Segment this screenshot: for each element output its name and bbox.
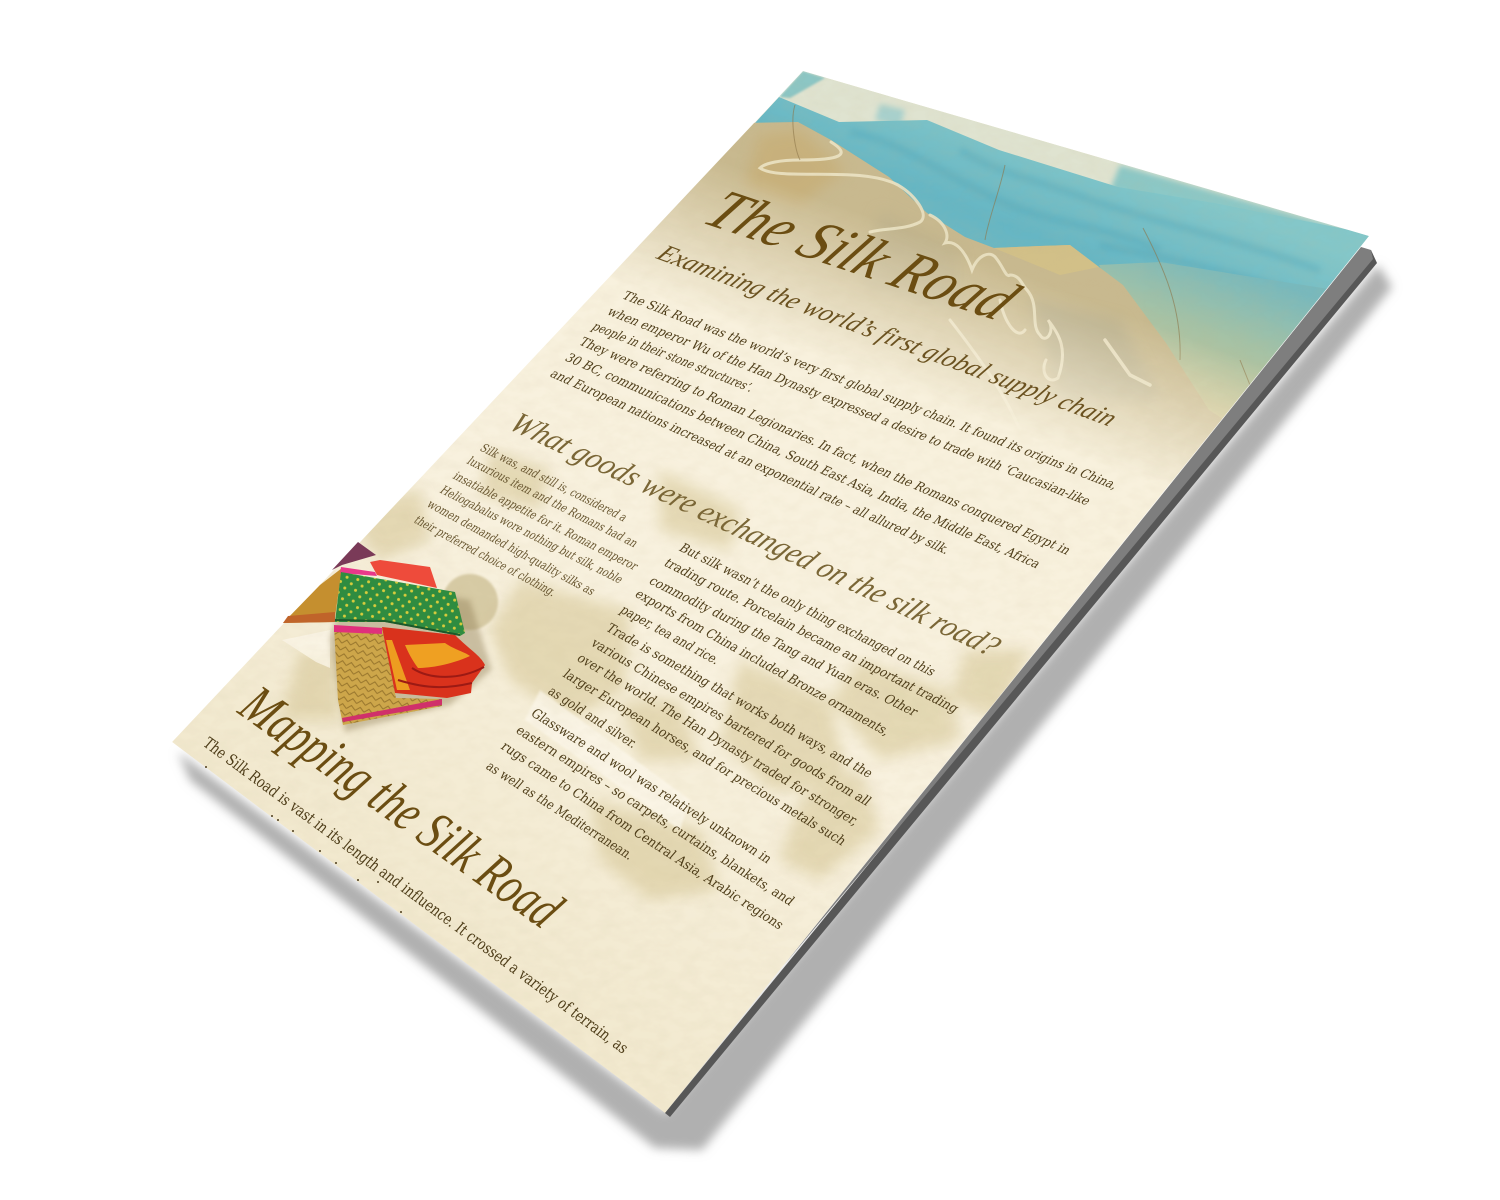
heading: mapping: Mapping the Silk Road [227, 674, 575, 940]
text block: left column: Silk was, and still is, considered a [477, 441, 631, 524]
text block: introduction: 30 BC, communications between China, South East Asia, India, the Middle East, Africa [561, 351, 1044, 572]
lower page stack [665, 247, 1377, 1117]
title: The Silk Road [691, 179, 1034, 332]
text block: introduction: when emperor Wu of the Han Dynasty expressed a desire to trade with ‘Caucasian-like [603, 305, 1094, 508]
green silk [335, 572, 465, 636]
distant blue ridges [755, 97, 1369, 289]
red silk [370, 560, 437, 588]
text block: left column: women demanded high-quality silks as [424, 497, 599, 598]
hazy green slopes [1099, 262, 1326, 418]
paper grain [160, 60, 1380, 1120]
text block: right column: as well as the Mediterranean. [482, 759, 637, 863]
tan mountains [620, 122, 1204, 476]
pink border [340, 567, 377, 576]
text block: right column: exports from China included Bronze ornaments, [631, 587, 894, 739]
text block: left column: Heliogabalus wore nothing but silk, noble [437, 483, 627, 586]
text block: introduction: They were referring to Roman Legionaries. In fact, when the Romans conquered Egypt in [575, 335, 1074, 558]
text block: right column: over the world. The Han Dynasty traded for stronger, [573, 651, 862, 829]
panel: parchment page [160, 60, 1380, 1120]
gold silk [283, 568, 342, 623]
text block: introduction: and European nations increased at an exponential rate – all allured by silk. [546, 367, 954, 557]
text block: introduction: The Silk Road was the world’s very first global supply chain. It found its origins in China, [618, 289, 1122, 493]
text block: right column: trading route. Porcelain became an important trading [660, 556, 962, 716]
text block: right column: Trade is something that works both ways, and the [602, 621, 876, 781]
woven gold silk [334, 626, 442, 725]
text block: left column: luxurious item and the Romans had an [464, 454, 642, 550]
clipped next line specks at page edge [205, 766, 402, 913]
text block: left column [411, 441, 642, 599]
text block: right column: paper, tea and rice. [616, 603, 723, 668]
text block: right column: commodity during the Tang and Yuan eras. Other [645, 574, 922, 720]
sky [781, 71, 1342, 228]
drop shadow [178, 265, 1392, 1150]
text block: right column: various Chinese empires bartered for goods from all [587, 635, 874, 809]
paper cracks [793, 105, 1250, 385]
text block: right column: larger European horses, and for precious metals such [559, 667, 850, 849]
text block: right column [482, 541, 962, 933]
text block: introduction: people in their stone structures’. [588, 320, 758, 395]
text block: right column: as gold and silver. [544, 684, 640, 752]
subtitle: Examining the world’s first global supply chain [650, 239, 1124, 431]
winding roads [760, 142, 1150, 430]
text block: left column: their preferred choice of clothing. [411, 513, 560, 599]
heading: goods exchanged: What goods were exchanged on the silk road? [502, 406, 1009, 662]
text block: right column: But silk wasn’t the only thing exchanged on this [675, 541, 939, 679]
red folded silk [382, 627, 485, 698]
text block: right column: rugs came to China from Central Asia, Arabic regions [497, 739, 787, 933]
landscape photo header [620, 71, 1369, 476]
illustration: folded silk fabrics [283, 542, 492, 732]
text block: left column: insatiable appetite for it. Roman emperor [450, 469, 642, 573]
text block: mapping intro: The Silk Road is vast in its length and influence. It crossed a variety of terrain, as [199, 734, 632, 1057]
purple silk [332, 542, 376, 570]
text block: right column: Glassware and wool was relatively unknown in [527, 706, 775, 867]
text block: right column: eastern empires – so carpets, curtains, blankets, and [512, 723, 798, 909]
engraved background scene [280, 450, 1030, 900]
